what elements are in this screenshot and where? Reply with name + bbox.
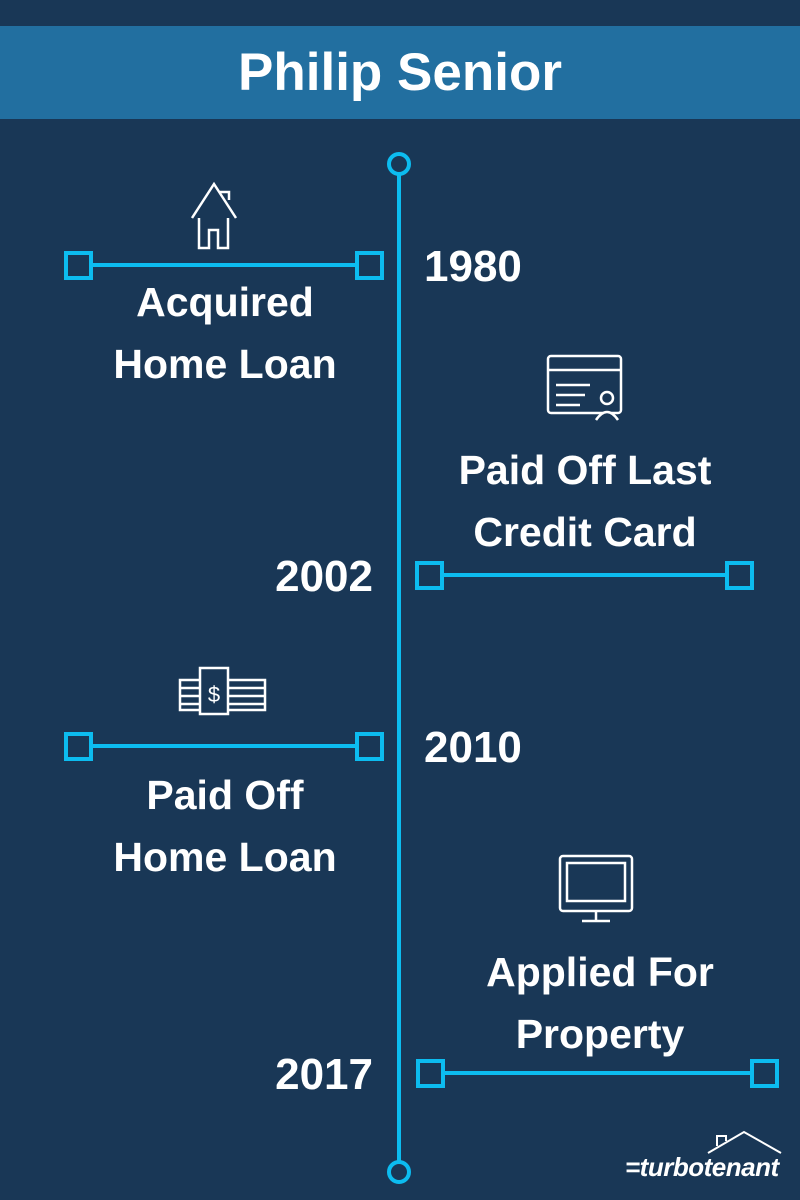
label: acquired home loan: Home Loan — [113, 341, 337, 387]
icon: money stack: $ — [208, 682, 220, 707]
label: paid off home loan — [113, 772, 337, 880]
logo house roof — [708, 1132, 781, 1153]
title banner: Philip Senior — [238, 43, 562, 102]
label: paid off credit card — [459, 447, 711, 555]
label: applied for property: Applied For — [486, 949, 714, 995]
icon: house — [192, 184, 236, 248]
icon: monitor — [560, 856, 632, 921]
year 1980: 1980 — [424, 242, 522, 291]
label: applied for property — [486, 949, 714, 1057]
label: paid off home loan: Paid Off — [146, 772, 304, 818]
year 2002: 2002 — [275, 552, 373, 601]
label: applied for property: Property — [516, 1011, 684, 1057]
label: acquired home loan: Acquired — [136, 279, 314, 325]
title banner — [0, 26, 800, 119]
logo: =turbotenant — [625, 1152, 779, 1182]
label: paid off credit card: Paid Off Last — [459, 447, 711, 493]
label: paid off credit card: Credit Card — [473, 509, 697, 555]
label: paid off home loan: Home Loan — [113, 834, 337, 880]
year 2010: 2010 — [424, 723, 522, 772]
icon: money stack — [180, 668, 265, 714]
label: acquired home loan — [113, 279, 337, 387]
icon: browser user — [548, 356, 621, 420]
year 2017: 2017 — [275, 1050, 373, 1099]
